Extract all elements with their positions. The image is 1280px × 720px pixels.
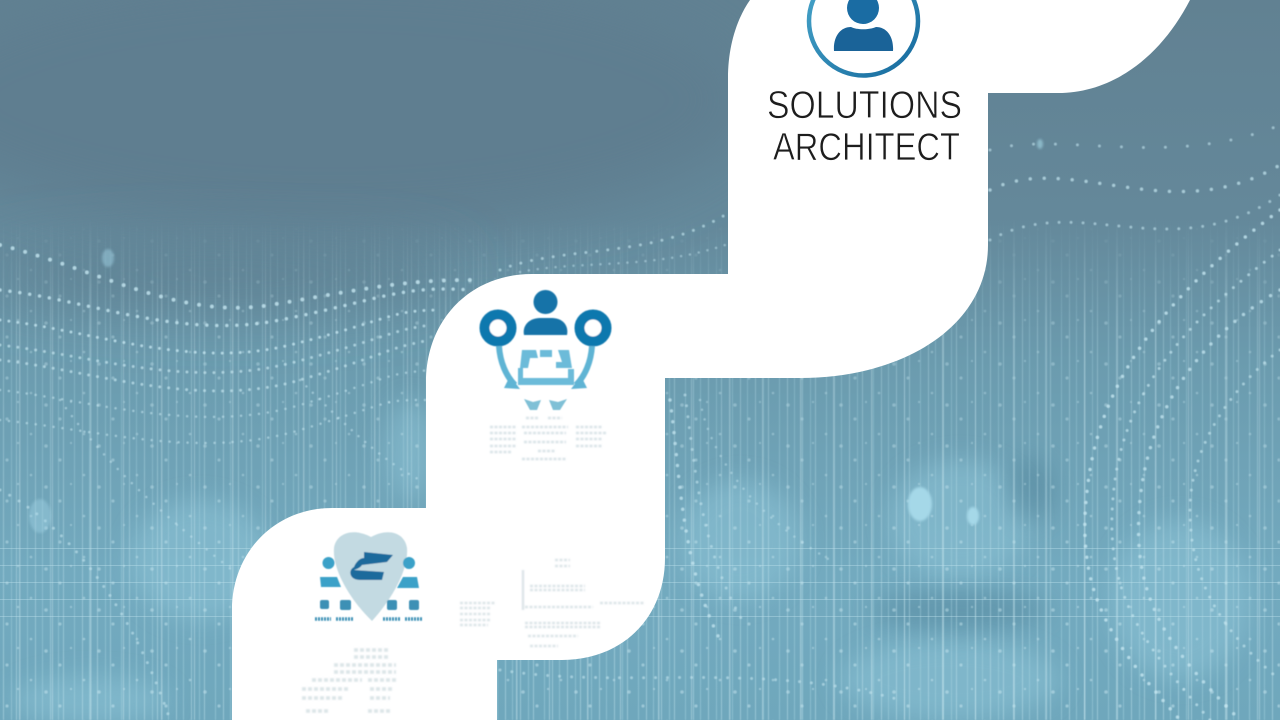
- step 1: solutions architect: [767, 0, 962, 169]
- heading: solutions architect: ARCHITECT: [773, 126, 960, 169]
- icon: right ring: [580, 314, 606, 342]
- icon: pale heart shield: [334, 532, 407, 621]
- icon: left figure: [320, 557, 341, 587]
- icon: small badges: [320, 600, 419, 610]
- icon: right figure: [397, 557, 419, 588]
- icon: dark ribbon: [350, 552, 393, 580]
- faded data grid: lower: [302, 650, 396, 711]
- icon: left ring: [484, 314, 512, 342]
- arrow: right: [571, 346, 592, 389]
- step 3: shield icon: [302, 532, 644, 711]
- icon: meeting desk: [518, 350, 574, 385]
- step 2: collaboration icon: [484, 290, 606, 459]
- arrow: left: [499, 346, 520, 389]
- faded caption text: [490, 418, 606, 459]
- icon: person in ring: [809, 0, 918, 76]
- faded data grid: right: [460, 560, 644, 646]
- white staircase ribbon: [232, 0, 1190, 720]
- heading: solutions architect: [767, 84, 962, 169]
- heading: solutions architect: SOLUTIONS: [767, 84, 962, 127]
- icon: badge labels: [315, 617, 423, 621]
- icon: centre person: [524, 290, 567, 335]
- icon: small butterflies: [524, 399, 567, 410]
